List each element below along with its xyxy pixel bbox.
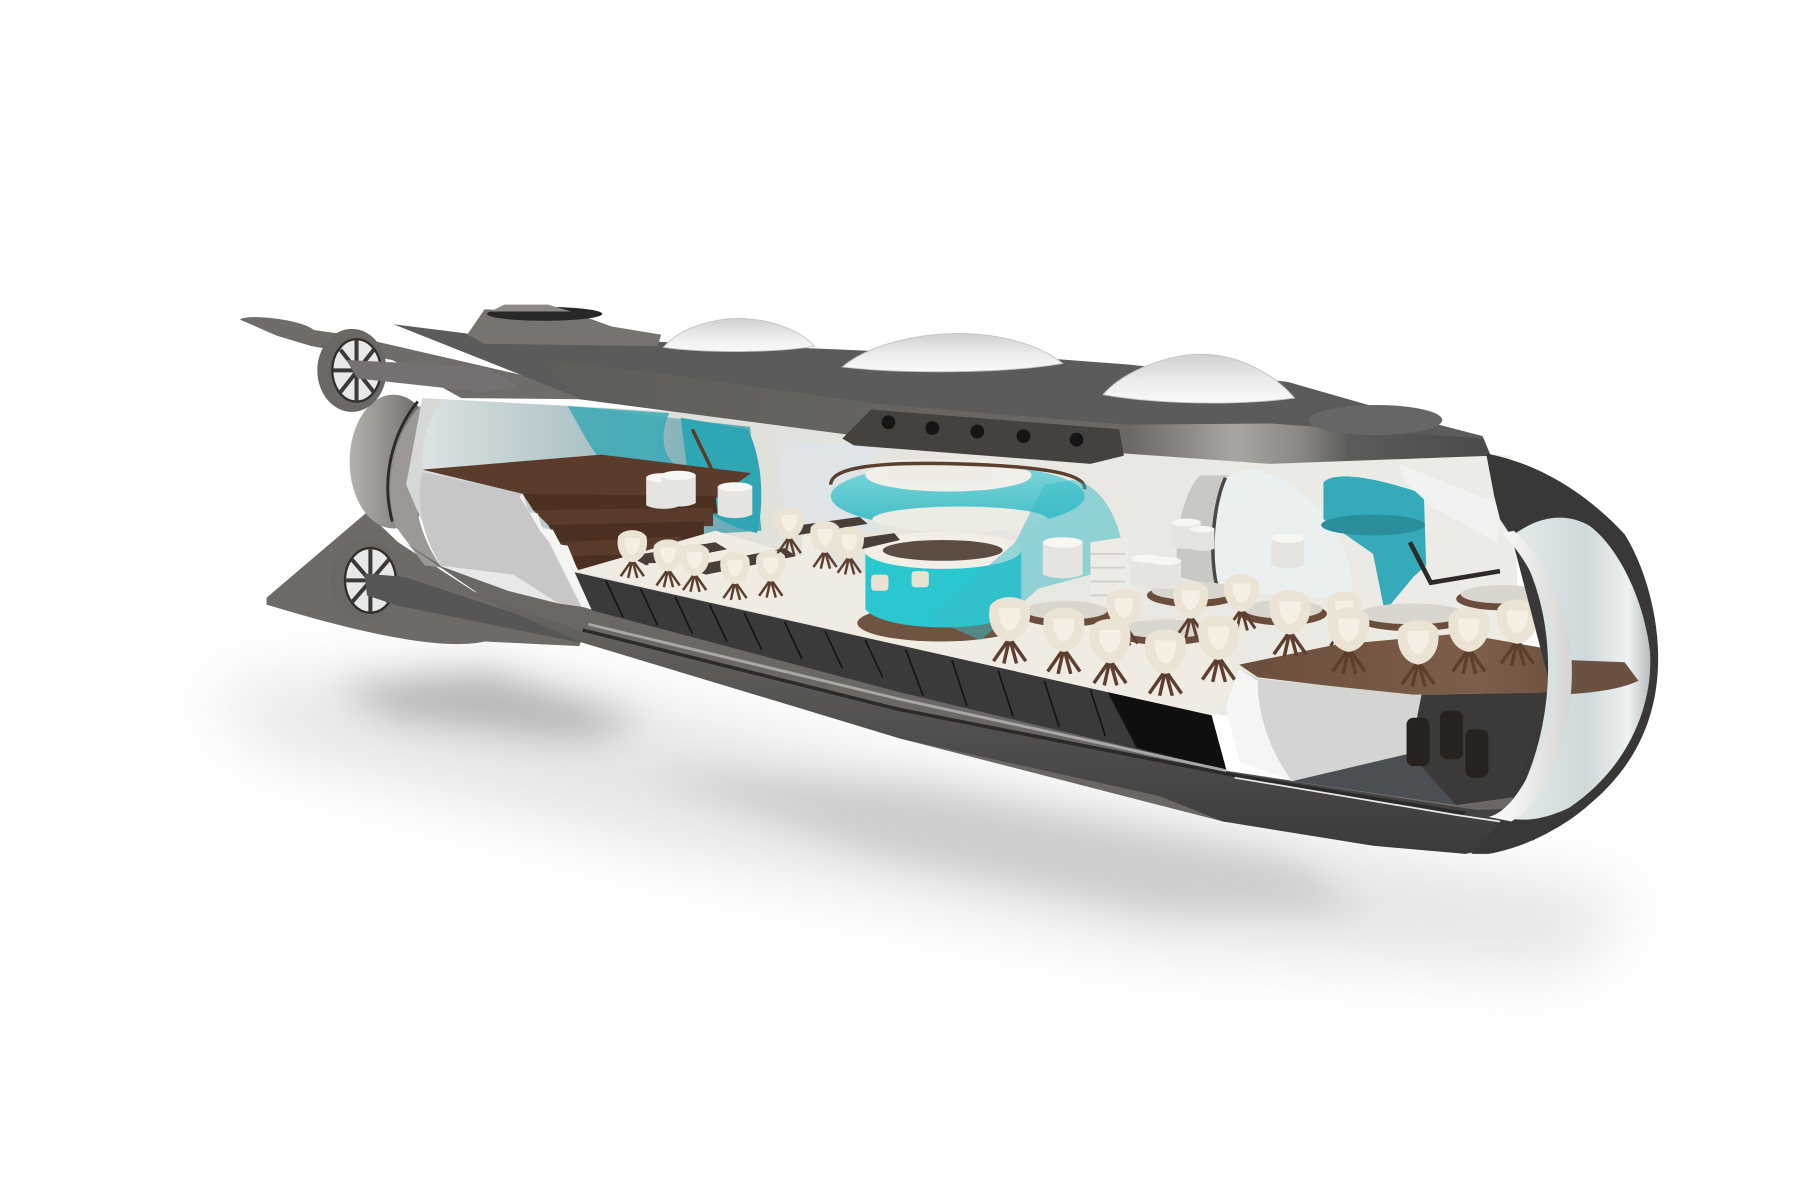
timber steps [523,494,718,571]
conning hatch [467,305,661,346]
floor-edge window strip [575,572,1227,771]
wood floor seen through glass [1565,660,1638,695]
forward round tables [1020,582,1548,645]
upper fin [240,317,583,399]
pendant lamps [646,471,1304,589]
tail bulb [350,395,437,528]
dark cowl [1471,453,1658,854]
ground shadow [196,663,1638,969]
upper tier [831,459,1085,532]
upper propeller [317,329,519,412]
aft chairs [618,507,864,600]
porthole block [842,410,1124,464]
aft tables [629,517,900,602]
pilot seats [1407,711,1488,778]
lower tier bar [857,532,1023,642]
white spiral stair [1090,537,1128,609]
forward chairs [989,574,1589,696]
lower pilot room [1225,669,1558,805]
forward wood floor [1239,633,1638,697]
hull silhouette base [404,542,1546,854]
stern: fins, propellers, tail bulb [240,317,583,646]
dome centre [842,333,1063,372]
structural rib [1398,464,1500,542]
deck top surface [393,324,1491,456]
teal spiral stair [1323,476,1426,612]
hull body [398,563,1535,854]
arched door [1177,475,1230,588]
deck side band [542,360,1491,464]
dining floor [575,531,1240,715]
forward salon: arched door and spiral stair [1177,464,1500,612]
dome aft [663,318,815,352]
white frame crescent [1488,531,1572,822]
teal stair glass [568,406,681,473]
aft glass wall [422,399,762,542]
lower propeller [330,540,583,643]
front cap [1308,405,1442,435]
timber upper deck [422,455,751,498]
hull rail [583,624,1500,822]
nose: glass dome and dark cowl [1471,453,1658,854]
cabin interior back wall [406,398,1523,715]
central bar: two tier teal atrium [831,459,1128,642]
lower fin [267,512,583,646]
glass stair [929,480,1125,640]
bar stools [871,571,929,591]
round porthole wall [780,441,877,533]
aft rings [391,398,443,568]
dome fore [1103,354,1295,403]
lower aft chamber [420,472,591,608]
upper deck [393,305,1491,464]
aft deck: glass wall, teal stairs, timber steps [420,399,877,608]
glass dome [1506,518,1650,820]
